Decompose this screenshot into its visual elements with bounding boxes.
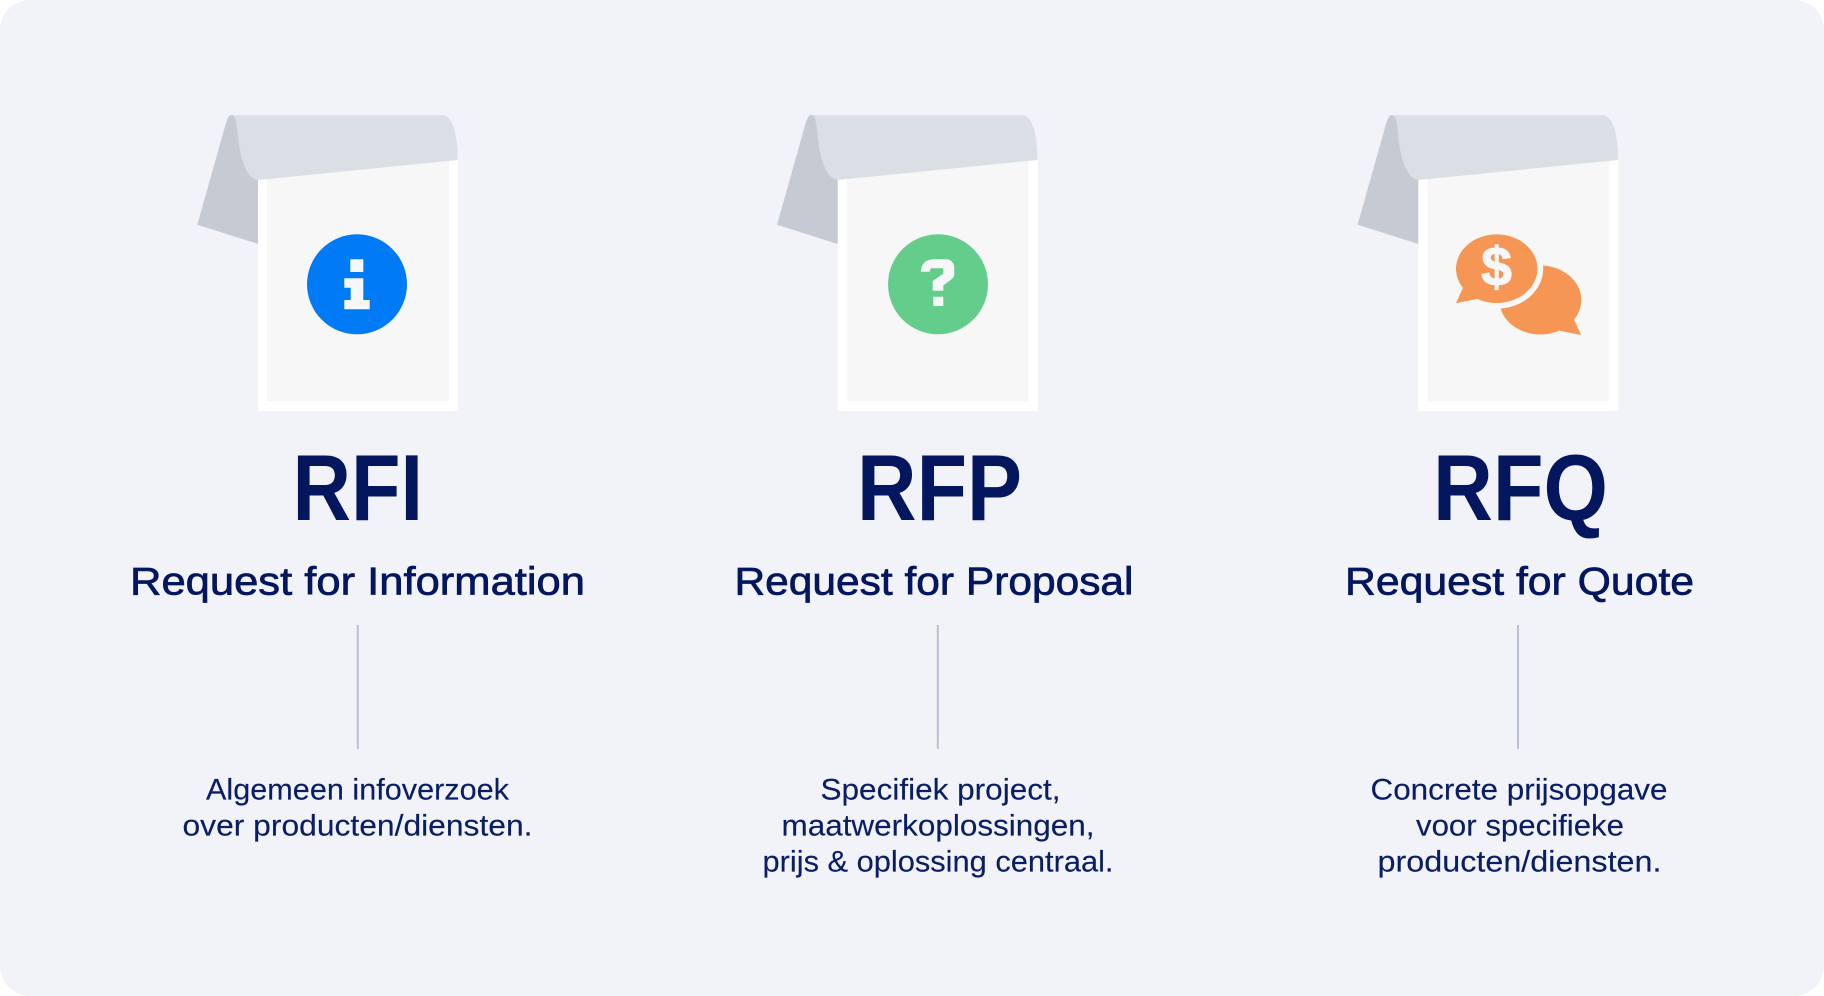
divider line <box>357 625 359 749</box>
description: RFQ: Concrete prijsopgave <box>1370 773 1668 806</box>
description: RFI: over producten/diensten. <box>182 810 532 843</box>
document illustration: RFQ <box>1358 115 1618 411</box>
description: RFQ: producten/diensten. <box>1378 846 1662 879</box>
heading: RFI: RFI <box>292 435 423 540</box>
document illustration: RFP <box>777 115 1038 411</box>
subtitle: Request for Information: Request for Information <box>130 560 585 603</box>
heading: RFP: RFP <box>857 435 1022 540</box>
panel: RFI <box>130 115 585 843</box>
panel: RFP <box>734 115 1134 879</box>
heading: RFQ: RFQ <box>1433 435 1608 540</box>
icon: price speech bubbles <box>1450 229 1581 335</box>
description: RFP <box>762 773 1114 879</box>
description: RFI: Algemeen infoverzoek <box>206 773 510 806</box>
panel: RFQ <box>1345 115 1694 879</box>
subtitle: Request for Quote: Request for Quote <box>1345 560 1694 603</box>
description: RFQ <box>1370 773 1668 879</box>
description: RFP: maatwerkoplossingen, <box>782 810 1094 843</box>
icon: price speech bubbles: $ <box>1481 236 1512 298</box>
description: RFP: Specifiek project, <box>820 773 1060 806</box>
description: RFQ: voor specifieke <box>1416 810 1624 843</box>
icon: question mark <box>888 234 988 334</box>
icon: info <box>307 234 407 334</box>
divider line <box>937 625 939 749</box>
subtitle: Request for Proposal: Request for Proposal <box>734 560 1134 603</box>
description: RFI <box>182 773 532 843</box>
divider line <box>1517 625 1519 749</box>
description: RFP: prijs & oplossing centraal. <box>762 846 1114 879</box>
document illustration: RFI <box>197 115 458 411</box>
